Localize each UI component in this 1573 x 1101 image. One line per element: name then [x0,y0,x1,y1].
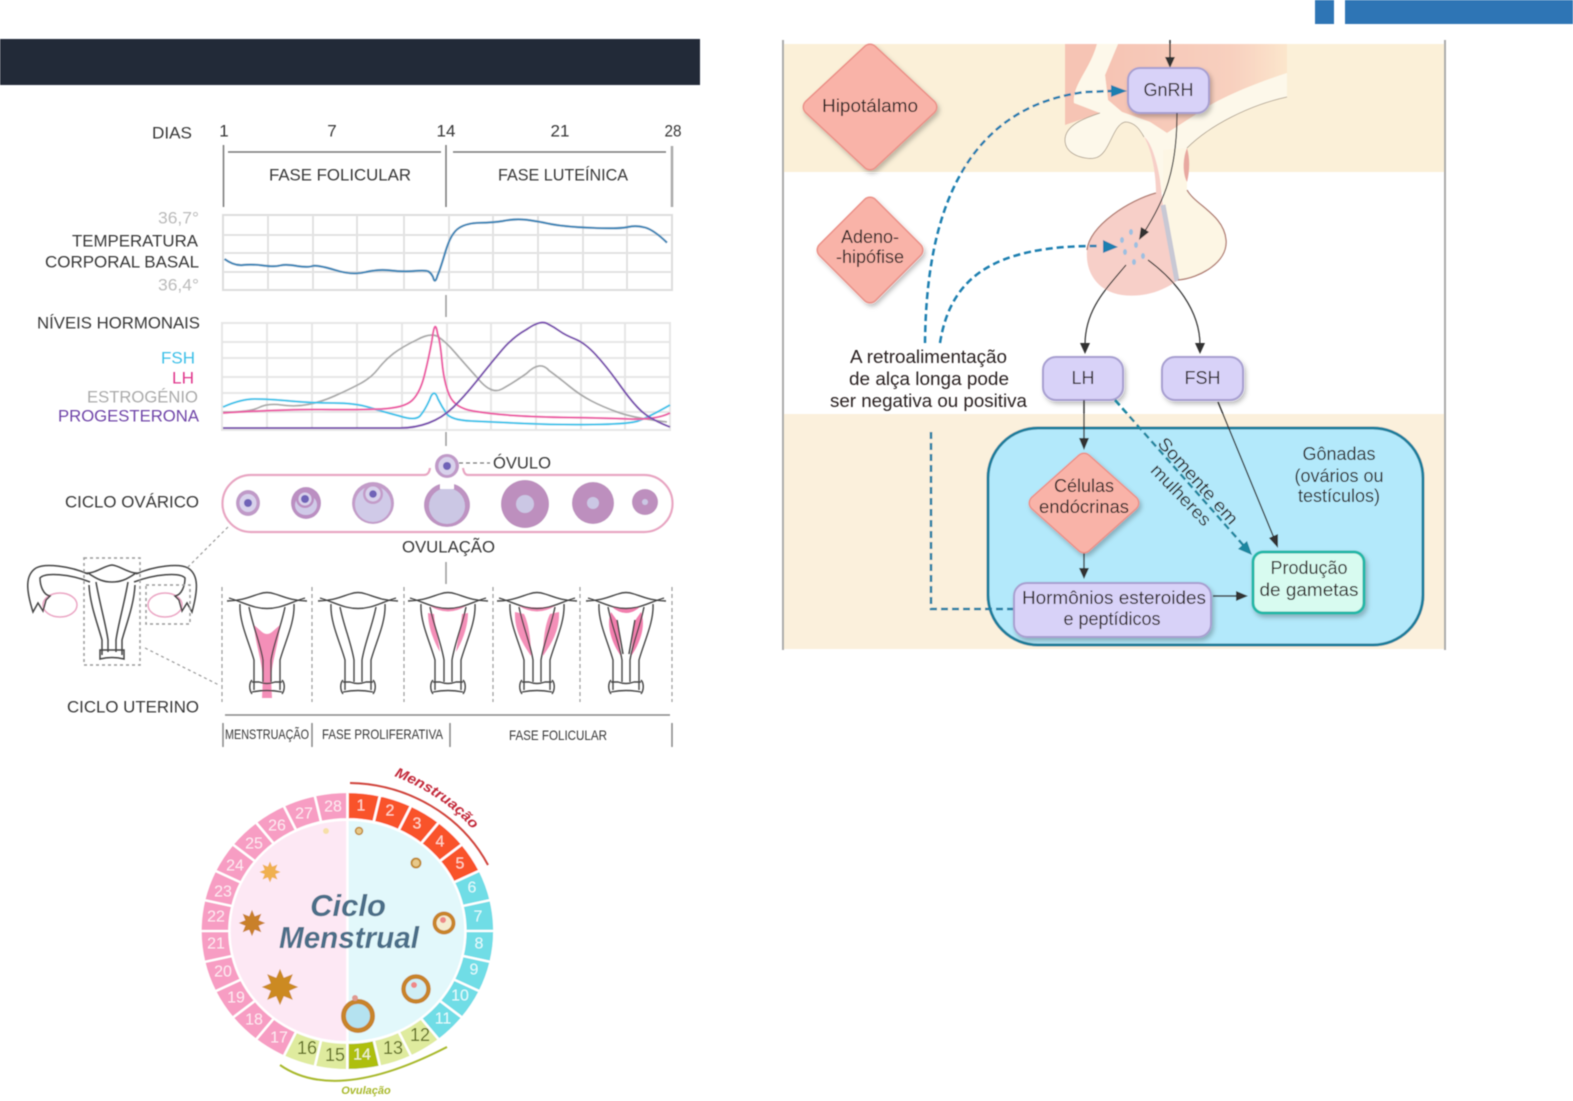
dashed arrow: women only [1115,400,1252,555]
wheel day numbers: 21 [207,936,225,952]
box: steroid and peptide hormones: e peptídicos [1063,609,1161,629]
uterine cycle: CICLO UTERINO [67,698,199,716]
wheel day numbers: 24 [226,858,244,874]
panel: gonads: Gônadas [1302,444,1376,464]
wheel day numbers: 15 [325,1045,345,1065]
menstruation arc: Menstruação [394,767,478,828]
box: gamete production: de gametas [1260,580,1358,600]
diamond: endocrine cells [1037,461,1131,545]
day scale and phases: 21 [551,122,569,140]
panel: gonads [988,428,1423,645]
dark title banner [0,39,700,85]
arrow into GnRH [1165,40,1175,68]
feedback note: A retroalimentação [850,347,1007,367]
wheel day numbers: 17 [270,1030,288,1046]
LH curve [223,327,670,419]
FSH curve [223,393,670,425]
uterus: menstruation [227,592,307,698]
hormone levels chart [37,314,670,430]
day scale and phases: 28 [664,122,682,140]
hormone levels chart: PROGESTERONA [58,406,200,426]
panel: cycle wheel [201,767,494,1098]
diamond: Adeno-hipófise [825,205,915,295]
wheel title: Menstrual [279,920,420,955]
estrogen curve [223,335,667,422]
day scale and phases: 14 [437,122,455,140]
box: GnRH: GnRH [1143,80,1194,100]
wheel day numbers: 2 [386,802,395,820]
wheel day numbers: 10 [451,988,469,1004]
wheel day numbers: 7 [474,908,483,926]
box: gamete production [1253,552,1364,613]
uterus: late secretory [586,592,666,694]
wheel day numbers: 3 [413,816,422,832]
hormone levels chart: FSH [161,348,195,368]
wheel day numbers: 27 [295,806,313,822]
wheel title [279,888,420,955]
wheel title: Ciclo [310,888,386,923]
diamond: Hipotálamo [811,52,929,162]
wheel day numbers: 28 [324,798,342,816]
panel: gonads: (ovários ou [1294,466,1384,486]
uterine cycle: FASE FOLICULAR [509,727,607,743]
day scale and phases [152,122,682,207]
temperature chart: CORPORAL BASAL [45,252,199,272]
wheel day numbers: 14 [353,1046,371,1064]
box: steroid and peptide hormones [1014,583,1211,637]
menstruation arc [349,767,490,866]
wheel day segments [197,788,498,1074]
top-right accent bars [1315,0,1573,24]
dashed feedback arrows to hypothalamus and pituitary [925,85,1127,343]
uterus: proliferative [408,592,488,694]
follicle icons in wheel [242,828,454,1030]
temperature chart: 36,7° [158,208,199,228]
wheel day numbers: 1 [357,798,366,814]
box: steroid and peptide hormones: Hormônios esteroides [1022,588,1206,608]
hormone levels chart: NÍVEIS HORMONAIS [37,314,200,332]
wheel day numbers: 26 [268,818,286,834]
wheel day numbers: 19 [227,990,245,1006]
wheel day numbers: 4 [436,834,445,850]
uterus: secretory [497,592,577,694]
ovule: ÓVULO [493,454,551,472]
panel: menstrual cycle chart [28,122,681,747]
wheel day numbers: 25 [245,836,263,852]
dashed arrow: women only: mulheres [1147,460,1215,530]
diamond: endocrine cells: Células [1054,476,1114,496]
box: LH [1043,357,1123,400]
box: GnRH [1128,68,1209,113]
wheel day numbers: 13 [383,1038,403,1058]
diamond: Adeno-hipófise: -hipófise [836,247,904,267]
ovarian cycle: CICLO OVÁRICO [65,492,199,512]
day scale and phases: DIAS [152,124,192,142]
panel: hormonal axis flowchart [783,40,1445,650]
box: FSH [1162,357,1243,400]
background bands [783,40,1445,650]
dashed long-loop return line [931,432,1014,609]
follicles [236,480,658,528]
hormone levels chart: ESTROGÉNIO [87,388,198,406]
wheel day numbers: 6 [468,880,477,896]
wheel day numbers: 11 [435,1010,451,1028]
wheel day numbers: 12 [410,1025,430,1045]
ovarian cycle [65,454,672,584]
wheel day numbers: 9 [470,962,479,978]
uterine cycle: MENSTRUAÇÃO [225,726,309,742]
wheel day numbers: 23 [214,884,232,900]
arrows from GnRH and pituitary [1080,113,1205,354]
day scale and phases: FASE LUTEÍNICA [498,166,629,184]
box: LH: LH [1071,368,1095,388]
feedback note: ser negativa ou positiva [830,391,1028,411]
diamond: endocrine cells: endócrinas [1039,497,1129,517]
wheel day numbers [207,798,484,1065]
day scale and phases: 1 [219,122,229,140]
day scale and phases: FASE FOLICULAR [269,166,411,184]
box: gamete production: Produção [1270,558,1348,578]
diamond: Hipotálamo: Hipotálamo [822,96,918,116]
feedback note [830,347,1028,411]
hormone levels chart: LH [172,368,194,388]
temperature chart: TEMPERATURA [72,232,199,250]
dashed arrow: women only: Somente em [1154,433,1242,529]
diamond: Adeno-hipófise: Adeno- [841,227,899,247]
solid arrows in gonads [1079,400,1278,601]
ovulation arc: Ovulação [341,1085,391,1097]
panel: gonads: testículos) [1298,486,1380,506]
icon: uterus and ovaries overview [28,527,228,685]
ovule [435,454,551,478]
wheel day numbers: 22 [207,908,225,926]
day scale and phases: 7 [327,122,337,140]
temperature chart [45,208,672,294]
uterus: early proliferative [318,592,398,694]
wheel day numbers: 18 [245,1012,263,1028]
anatomy: hypothalamus and pituitary [1065,44,1287,296]
uterine cycle: FASE PROLIFERATIVA [322,726,444,742]
ovarian cycle: OVULAÇÃO [402,538,495,556]
wheel day numbers: 5 [456,856,465,872]
wheel day numbers: 8 [475,936,484,952]
uterine cycle [67,587,672,747]
ovulation arc [280,1047,447,1097]
box: FSH: FSH [1184,368,1220,388]
wheel day numbers: 16 [297,1038,317,1058]
wheel inner halves [229,821,465,1041]
temperature chart: 36,4° [158,276,199,294]
wheel day numbers: 20 [214,964,232,980]
progesterone curve [223,323,670,428]
feedback note: de alça longa pode [849,369,1009,389]
